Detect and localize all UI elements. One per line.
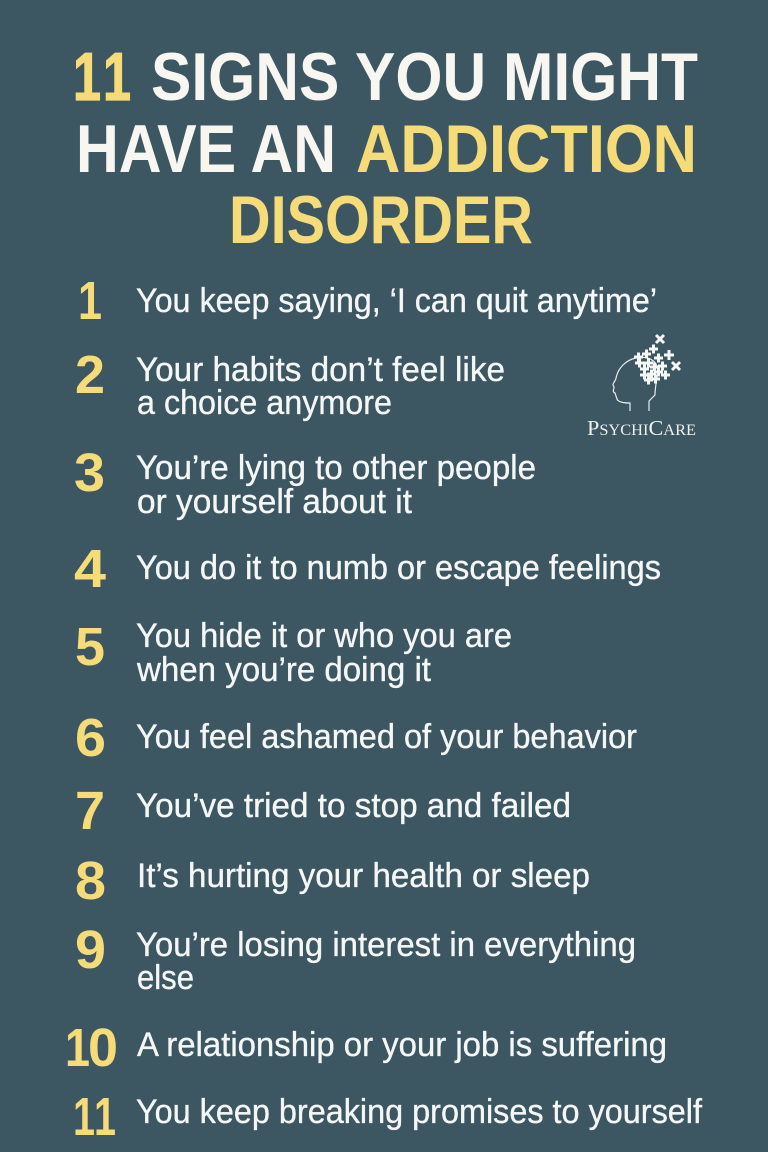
item 6 [75,708,637,768]
item 5: 5 [75,617,105,677]
item 4: You do it to numb or escape feelings [136,549,661,587]
item 11 [73,1087,703,1147]
item 2: Your habits don’t feel like [136,351,505,389]
item 1: 1 [78,271,102,331]
item 9 [75,920,636,997]
item 7 [75,781,571,841]
item 2 [75,345,505,422]
item 8: 8 [75,851,106,911]
item 10: 0 [88,1018,118,1078]
item 3: or yourself about it [137,483,413,521]
item 9: You’re losing interest in everything [136,926,636,964]
item 5: You hide it or who you are [136,617,512,655]
item 11: 1 [94,1087,116,1147]
item 6: 6 [75,708,106,768]
item 2: 2 [75,345,105,405]
title [73,39,698,258]
item 7: 7 [75,781,105,841]
item 3: You’re lying to other people [136,449,536,487]
item 10 [65,1018,667,1078]
item 5: when you’re doing it [136,651,432,689]
item 1: You keep saying, ‘I can quit anytime’ [136,282,657,320]
item 1 [78,271,657,331]
title: 1 [73,39,101,115]
item 7: You’ve tried to stop and failed [136,787,571,825]
item 6: You feel ashamed of your behavior [136,718,637,756]
item 8: It’s hurting your health or sleep [137,857,590,895]
logo wordmark: PSYCHICARE [587,416,696,440]
title: 1 [103,39,131,115]
item 8 [75,851,590,911]
title: SIGNS YOU MIGHT [151,39,698,115]
icon: head with crosses [613,335,680,411]
title: HAVE AN [76,111,336,187]
item 9: 9 [75,920,106,980]
item 3 [74,443,536,521]
item 4: 4 [74,539,106,599]
item 11: You keep breaking promises to yourself [136,1093,703,1131]
item 4 [74,539,661,599]
title: ADDICTION [356,111,697,187]
item 5 [75,617,512,689]
item 11: 1 [73,1087,95,1147]
title: DISORDER [229,182,533,258]
item 9: else [137,959,194,997]
item 10: 1 [65,1018,90,1078]
item 3: 3 [74,443,105,503]
logo: PsychiCare [587,335,696,440]
item 2: a choice anymore [137,384,392,422]
item 10: A relationship or your job is suffering [137,1026,667,1064]
